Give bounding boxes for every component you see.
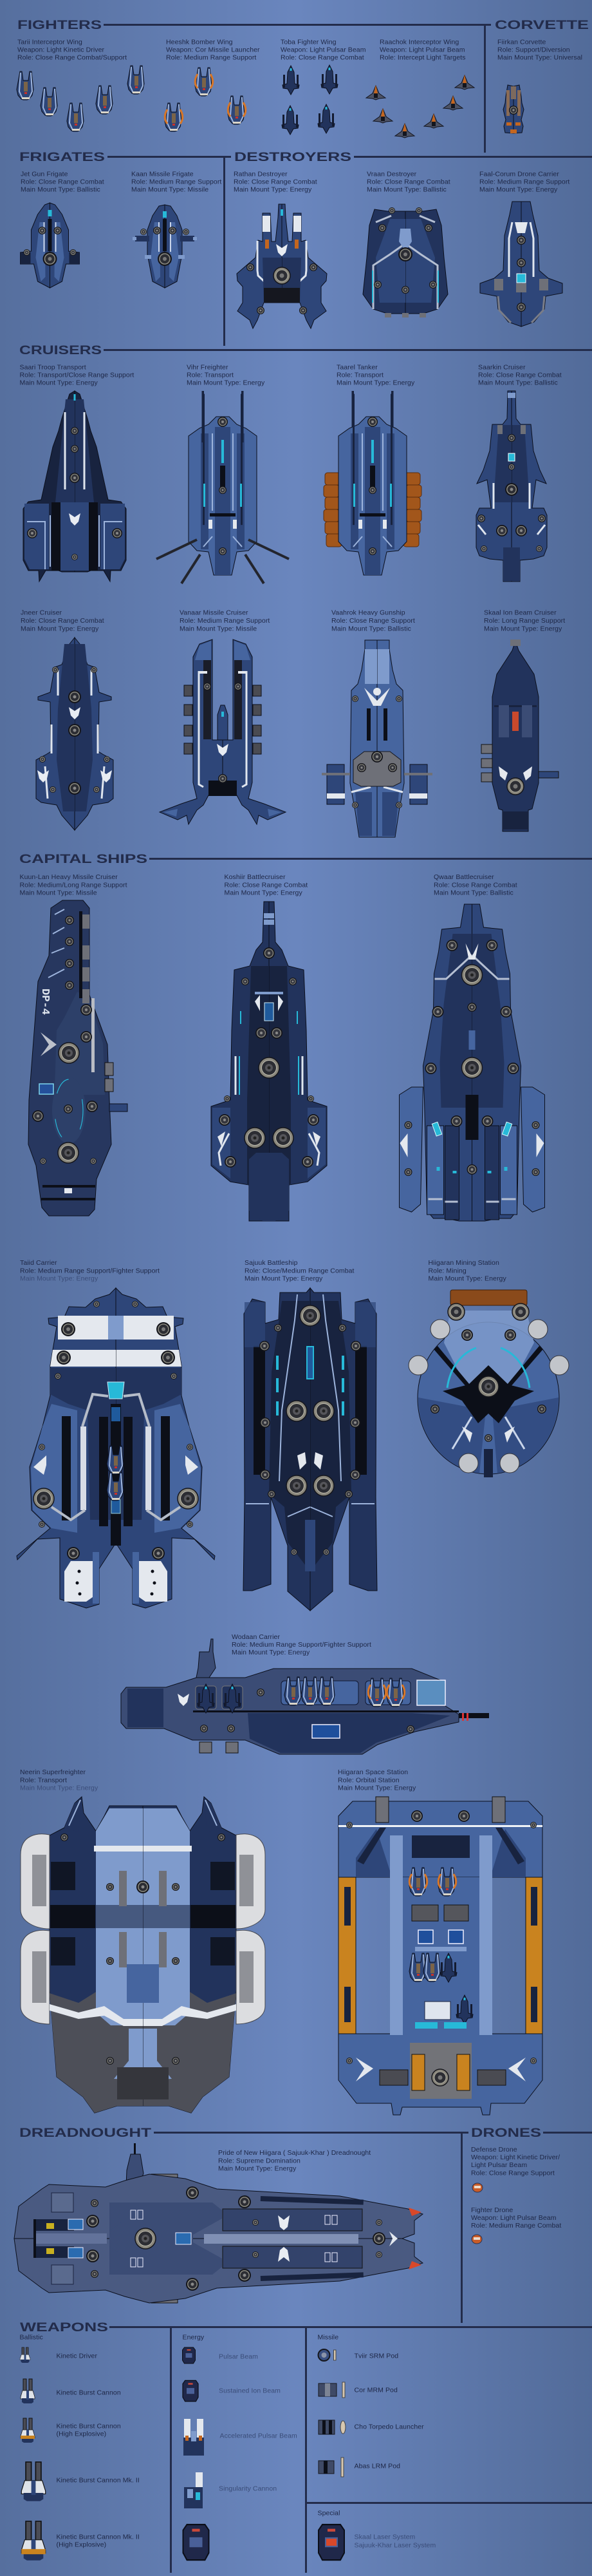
- text: Vanaar: Vanaar Missile Cruiser: [180, 609, 248, 617]
- weapon: Kinetic Burst Cannon: [21, 2379, 35, 2403]
- text: Vraan: Main Mount Type: Ballistic: [367, 185, 447, 193]
- text: Rathan: Main Mount Type: Energy: [234, 185, 312, 193]
- text: Qwaar: Qwaar Battlecruiser: [434, 873, 494, 881]
- ship: Hiigaran space station: [338, 1797, 542, 2115]
- text: Hiigaran Space Station: Main Mount Type: Energy: [338, 1785, 416, 1792]
- text: Saarkin: Main Mount Type: Ballistic: [478, 379, 558, 386]
- ship: Jet frigate: [21, 203, 80, 288]
- text: Jet: Main Mount Type: Ballistic: [21, 185, 100, 193]
- ship: Qwaar battlecruiser: [399, 904, 544, 1221]
- heading: destroyers: DESTROYERS: [234, 151, 351, 164]
- ship: Jneer cruiser: [36, 638, 113, 830]
- heading: fighters: FIGHTERS: [17, 19, 102, 32]
- text: Vihr: Role: Transport: [187, 371, 234, 379]
- text: Jneer: Role: Close Range Combat: [21, 617, 104, 625]
- text: Wodaan: Main Mount Type: Energy: [232, 1649, 310, 1656]
- ship: Saarkin cruiser: [476, 391, 547, 582]
- label: Accelerated Pulsar Beam: Accelerated Pulsar Beam: [220, 2432, 297, 2439]
- text: Vaahrok: Vaahrok Heavy Gunship: [331, 609, 405, 617]
- label: laser systems: Skaal Laser System: [354, 2533, 415, 2541]
- ship: Pride of New Hiigara dreadnought: [14, 2143, 423, 2303]
- text: Faal-Corum: Faal-Corum Drone Carrier: [479, 170, 559, 178]
- weapon: Pulsar Beam: [183, 2347, 196, 2363]
- text: Vraan: Role: Close Range Combat: [367, 178, 450, 185]
- text: Saarkin: Saarkin Cruiser: [478, 363, 526, 371]
- hull marking: DP-4: [39, 989, 51, 1015]
- text: Taarel: Main Mount Type: Energy: [337, 379, 415, 386]
- heading: capital ships: CAPITAL SHIPS: [19, 853, 147, 866]
- label: Kinetic Burst Cannon Mk. II HE: Kinetic Burst Cannon Mk. II: [57, 2533, 140, 2541]
- label: Kinetic Burst Cannon HE: (High Explosive): [57, 2430, 106, 2438]
- text: Ballistic: Ballistic: [19, 2334, 43, 2342]
- text: Raachok: Weapon: Light Pulsar Beam: [380, 46, 465, 54]
- text: Toba: Weapon: Light Pulsar Beam: [281, 46, 366, 54]
- weapon: Tviir SRM Pod: [318, 2349, 336, 2361]
- weapon: Kinetic Burst Cannon HE: [21, 2418, 35, 2443]
- label: Kinetic Burst Cannon HE: Kinetic Burst Cannon: [57, 2423, 121, 2430]
- ship: Neerin superfreighter: [21, 1797, 265, 2113]
- text: Defense Drone: Light Pulsar Beam: [471, 2161, 527, 2169]
- text: Rathan: Role: Close Range Combat: [234, 178, 317, 185]
- text: Neerin: Role: Transport: [20, 1776, 67, 1784]
- text: Jneer: Main Mount Type: Energy: [21, 625, 99, 632]
- text: Hiigaran Mining: Role: Mining: [429, 1267, 467, 1274]
- text: Qwaar: Role: Close Range Combat: [434, 881, 517, 889]
- text: Skaal: Skaal Ion Beam Cruiser: [484, 609, 557, 617]
- weapon: Cor MRM Pod: [319, 2382, 345, 2398]
- text: Hiigaran Mining: Main Mount Type: Energy: [429, 1275, 506, 1283]
- label: Cor MRM Pod: Cor MRM Pod: [354, 2387, 398, 2394]
- text: Koshiir: Koshiir Battlecruiser: [224, 873, 286, 881]
- weapon: Cho Torpedo Launcher: [319, 2420, 346, 2434]
- weapon: Kinetic Burst Cannon Mk. II HE: [21, 2521, 46, 2561]
- weapon: Abas LRM Pod: [319, 2458, 344, 2477]
- heading: drones: DRONES: [471, 2126, 541, 2140]
- text: Tarii: Tarii Interceptor Wing: [17, 39, 82, 46]
- text: Taiid: Taiid Carrier: [20, 1259, 57, 1267]
- label: laser systems: Sajuuk-Khar Laser System: [354, 2541, 436, 2549]
- text: Hiigaran Mining: Hiigaran Mining Station: [429, 1259, 499, 1267]
- label: Kinetic Burst Cannon: Kinetic Burst Cannon: [57, 2389, 121, 2397]
- text: Pride of New Hiigara: Main Mount Type: Energy: [218, 2165, 297, 2173]
- ship: Wodaan carrier: [121, 1639, 489, 1754]
- fighters: Heeshk wing: [165, 68, 246, 131]
- text: Pride of New Hiigara: Role: Supreme Domination: [218, 2157, 301, 2164]
- ship: Skaal ion beam cruiser: [481, 639, 559, 831]
- text: Toba: Toba Fighter Wing: [281, 39, 337, 46]
- text: Skaal: Main Mount Type: Energy: [484, 625, 562, 632]
- text: Kuun-Lan: Kuun-Lan Heavy Missile Cruiser: [19, 873, 118, 881]
- text: Fighter Drone: Role: Medium Range Combat: [471, 2222, 561, 2230]
- text: Vihr: Vihr Freighter: [187, 363, 228, 371]
- text: Defense Drone: Role: Close Range Support: [471, 2169, 555, 2177]
- text: Vaahrok: Main Mount Type: Ballistic: [331, 625, 411, 632]
- label: Abas LRM Pod: Abas LRM Pod: [354, 2463, 400, 2470]
- text: Energy: Energy: [183, 2334, 205, 2342]
- ship: Vraan destroyer: [363, 207, 448, 317]
- text: Taiid: Main Mount Type: Energy: [20, 1275, 98, 1283]
- text: Kuun-Lan: Main Mount Type: Missile: [19, 889, 97, 897]
- ship: Hiigaran mining station: [409, 1290, 569, 1477]
- text: Skaal: Role: Long Range Support: [484, 617, 565, 625]
- weapon: Sustained Ion Beam: [183, 2380, 198, 2401]
- ship: Kaan frigate: [133, 205, 197, 288]
- ship: Faal-Corum drone carrier: [480, 202, 562, 327]
- fighters: Tarii wing: [17, 66, 144, 131]
- text: Vanaar: Role: Medium Range Support: [180, 617, 270, 625]
- ship: Taiid carrier: [17, 1288, 215, 1608]
- heading: dreadnought: DREADNOUGHT: [19, 2126, 152, 2140]
- text: Taarel: Taarel Tanker: [337, 363, 378, 371]
- text: Hiigaran Space Station: Hiigaran Space Station: [338, 1768, 408, 1776]
- text: Sajuuk: Main Mount Type: Energy: [245, 1275, 323, 1283]
- text: Defense Drone: Defense Drone: [471, 2146, 517, 2154]
- text: Qwaar: Main Mount Type: Ballistic: [434, 889, 513, 897]
- text: Tarii: Role: Close Range Combat/Support: [17, 54, 127, 62]
- text: Raachok: Role: Intercept Light Targets: [380, 54, 465, 62]
- text: Kaan: Main Mount Type: Missile: [131, 185, 208, 193]
- heading: weapons: WEAPONS: [20, 2321, 108, 2334]
- text: Fiirkan: Fiirkan Corvette: [497, 39, 546, 46]
- ship: Vanaar missile cruiser: [160, 639, 286, 824]
- heading: corvette: CORVETTE: [495, 19, 589, 32]
- text: Jet: Role: Close Range Combat: [21, 178, 104, 185]
- text: Heeshk: Weapon: Cor Missile Launcher: [166, 46, 260, 54]
- label: Pulsar Beam: Pulsar Beam: [219, 2353, 258, 2361]
- text: Faal-Corum: Main Mount Type: Energy: [479, 185, 558, 193]
- fighters: Raachok wing: [366, 75, 474, 138]
- text: Neerin: Main Mount Type: Energy: [20, 1785, 98, 1792]
- weapon: Kinetic Burst Cannon Mk. II: [21, 2462, 46, 2501]
- ship: Koshiir battlecruiser: [211, 902, 327, 1221]
- fighters: Toba wing: [282, 65, 338, 135]
- text: Jet: Jet Gun Frigate: [21, 170, 68, 178]
- text: Saari: Saari Troop Transport: [19, 363, 86, 371]
- text: Raachok: Raachok Interceptor Wing: [380, 39, 459, 46]
- text: Pride of New Hiigara: Pride of New Hiigara ( Sajuuk-Khar ) Dreadnought: [218, 2149, 371, 2157]
- text: Vanaar: Main Mount Type: Missile: [180, 625, 257, 632]
- text: Fiirkan: Main Mount Type: Universal: [497, 54, 582, 62]
- heading: cruisers: CRUISERS: [19, 344, 102, 357]
- text: Taiid: Role: Medium Range Support/Fighter Support: [20, 1267, 160, 1274]
- weapon: Accelerated Pulsar Beam: [183, 2419, 204, 2456]
- text: Vaahrok: Role: Close Range Support: [331, 617, 415, 625]
- text: Koshiir: Role: Close Range Combat: [224, 881, 308, 889]
- label: Kinetic Driver: Kinetic Driver: [57, 2352, 97, 2360]
- weapon: Singularity Cannon: [184, 2472, 203, 2508]
- text: Jneer: Jneer Cruiser: [21, 609, 62, 617]
- ship: Sajuuk battleship: [243, 1288, 377, 1611]
- text: Fighter Drone: Fighter Drone: [471, 2206, 513, 2214]
- icon: defense drone: [472, 2183, 483, 2192]
- text: Hiigaran Space Station: Role: Orbital Station: [338, 1776, 400, 1784]
- text: Kuun-Lan: Role: Medium/Long Range Support: [19, 881, 127, 889]
- heading: frigates: FRIGATES: [19, 151, 105, 164]
- text: Vihr: Main Mount Type: Energy: [187, 379, 265, 386]
- label: Cho Torpedo Launcher: Cho Torpedo Launcher: [354, 2423, 424, 2430]
- label: Kinetic Burst Cannon Mk. II: Kinetic Burst Cannon Mk. II: [57, 2477, 140, 2485]
- text: Kaan: Kaan Missile Frigate: [131, 170, 194, 178]
- ship: Kuun-Lan heavy missile cruiser: [28, 900, 127, 1216]
- text: Defense Drone: Weapon: Light Kinetic Driver/: [471, 2154, 560, 2161]
- text: Vraan: Vraan Destroyer: [367, 170, 417, 178]
- text: Heeshk: Heeshk Bomber Wing: [166, 39, 233, 46]
- text: Special: Special: [318, 2509, 340, 2517]
- icon: fighter drone: [472, 2235, 482, 2244]
- text: Fiirkan: Role: Support/Diversion: [497, 46, 570, 54]
- text: Taarel: Role: Transport: [337, 371, 384, 379]
- label: Kinetic Burst Cannon Mk. II HE: (High Explosive): [57, 2541, 106, 2549]
- text: Toba: Role: Close Range Combat: [281, 54, 364, 62]
- text: Sajuuk: Sajuuk Battleship: [245, 1259, 298, 1267]
- text: Missile: Missile: [318, 2334, 338, 2342]
- text: Tarii: Weapon: Light Kinetic Driver: [17, 46, 105, 54]
- ship: Vaahrok gunship: [322, 640, 432, 837]
- text: Fighter Drone: Weapon: Light Pulsar Beam: [471, 2214, 557, 2222]
- text: Saari: Main Mount Type: Energy: [19, 379, 98, 386]
- text: Heeshk: Role: Medium Range Support: [166, 54, 256, 62]
- ship: Rathan destroyer: [237, 204, 327, 328]
- text: Neerin: Neerin Superfreighter: [20, 1768, 86, 1776]
- label: Singularity Cannon: Singularity Cannon: [219, 2485, 277, 2492]
- text: Koshiir: Main Mount Type: Energy: [224, 889, 302, 897]
- text: Wodaan: Wodaan Carrier: [232, 1633, 280, 1641]
- text: Rathan: Rathan Destroyer: [234, 170, 288, 178]
- text: Saari: Role: Transport/Close Range Support: [19, 371, 134, 379]
- ship: Vihr freighter: [156, 391, 289, 583]
- ship: Fiirkan corvette: [503, 85, 524, 133]
- weapon: Kinetic Driver: [20, 2347, 30, 2363]
- ship: Saari transport: [23, 391, 126, 582]
- text: Kaan: Role: Medium Range Support: [131, 178, 221, 185]
- text: Sajuuk: Role: Close/Medium Range Combat: [245, 1267, 355, 1274]
- label: Sustained Ion Beam: Sustained Ion Beam: [219, 2387, 281, 2394]
- weapon: large ion array: [183, 2524, 208, 2560]
- label: Tviir SRM Pod: Tviir SRM Pod: [354, 2352, 398, 2360]
- weapon: Skaal / Sajuuk-Khar laser system: [319, 2524, 344, 2560]
- text: Saarkin: Role: Close Range Combat: [478, 371, 562, 379]
- ship: Taarel tanker: [324, 391, 421, 575]
- text: Wodaan: Role: Medium Range Support/Fighter Support: [232, 1641, 371, 1649]
- text: Faal-Corum: Role: Medium Range Support: [479, 178, 569, 185]
